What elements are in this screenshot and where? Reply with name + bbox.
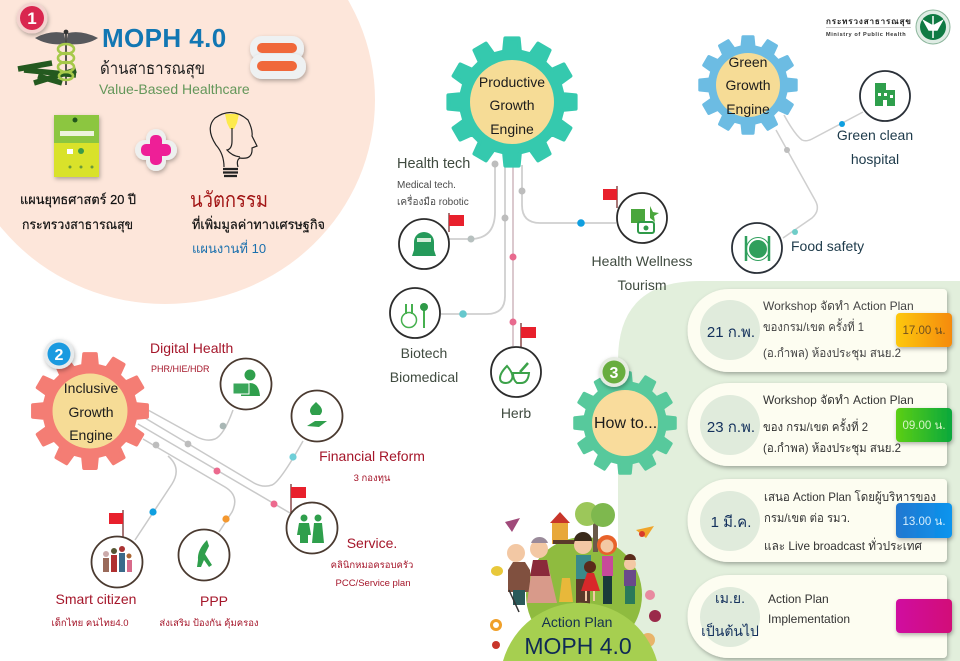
text: ministry: กระทรวงสาธารณสุข (22, 217, 133, 233)
girl (581, 561, 600, 601)
icon: caduceus (18, 30, 98, 85)
connector lines: green engine (776, 112, 863, 238)
grandfather (507, 544, 530, 612)
card: 1 Mar (688, 479, 952, 562)
badge 1: 1 (27, 9, 37, 28)
gear: productive growth engine: Engine (490, 121, 534, 137)
mother (597, 535, 617, 604)
text: health tech: Health tech (397, 156, 470, 172)
icon: equals (250, 36, 306, 79)
node: food safety (732, 223, 782, 273)
gear: inclusive growth engine: Inclusive (64, 380, 118, 396)
text: ppp: PPP (200, 593, 228, 609)
text: health wellness tourism: Health Wellness (592, 253, 692, 269)
text: biotech biomedical: Biotech (401, 345, 447, 361)
text: food safety: Food safety (791, 238, 864, 254)
gear: green growth engine: Engine (726, 101, 770, 117)
gear: productive growth engine: Growth (489, 97, 535, 113)
text: service: Service. (347, 535, 397, 551)
connector dots: productive engine (459, 160, 585, 326)
decorations: butterfly, bee, flowers (490, 518, 661, 649)
gear: inclusive growth engine: Engine (69, 427, 113, 443)
badge 2: 2 (55, 347, 64, 364)
text: value based healthcare: Value-Based Healthcare (99, 81, 250, 97)
text: digital health (150, 340, 233, 374)
connector lines: inclusive engine (135, 410, 303, 540)
text: green clean hospital: Green clean (837, 127, 913, 143)
text: plan 10: แผนงานที่ 10 (192, 240, 266, 256)
dog (559, 578, 573, 602)
text: ppp: ส่งเสริม ป้องกัน คุ้มครอง (159, 618, 259, 629)
connector dots: inclusive engine (149, 423, 297, 523)
text: herb: Herb (501, 405, 531, 421)
grandmother (527, 537, 557, 603)
logo: ministry of public health: Ministry of Public Health (826, 32, 906, 38)
card: 21 Feb (688, 289, 952, 372)
connector dots: green engine (784, 121, 845, 235)
node: health wellness tourism (603, 186, 667, 243)
text: public health: ด้านสาธารณสุข (100, 59, 205, 79)
card: 21 Feb: 21 ก.พ. (707, 324, 755, 341)
card: 23 Feb: 09.00 น. (902, 420, 946, 432)
card: 21 Feb: 17.00 น. (902, 325, 946, 337)
text: health tech: Medical tech. (397, 180, 456, 191)
node: digital health (220, 358, 272, 410)
connector lines: productive engine (441, 165, 616, 346)
text: health tech: เครื่องมือ robotic (397, 194, 469, 208)
badge 1 (16, 2, 48, 34)
text: action plan: Action Plan (542, 614, 612, 630)
text: health tech (397, 156, 470, 208)
text: green clean hospital: hospital (851, 151, 899, 167)
text: digital health: Digital Health (150, 340, 233, 356)
hill foreground (503, 603, 657, 661)
heading: MOPH 4.0: MOPH 4.0 (102, 23, 227, 53)
house and tree (550, 502, 615, 552)
card: 1 Mar: เสนอ Action Plan โดยผู้บริหารของ (764, 490, 936, 505)
icon: plus (135, 129, 177, 171)
card: 21 Feb: (อ.กำพล) ห้องประชุม สนย.2 (763, 346, 901, 361)
card: 23 Feb: ของ กรม/เขต ครั้งที่ 2 (763, 418, 868, 434)
text: financial reform: 3 กองทุน (354, 473, 391, 484)
gear: green growth engine: Growth (725, 77, 771, 93)
text: smart citizen: เด็กไทย คนไทย4.0 (51, 616, 129, 629)
text: smart citizen: Smart citizen (56, 591, 136, 607)
text: service: คลินิกหมอครอบครัว (331, 560, 413, 571)
icon: strategy book (54, 115, 99, 177)
boy (624, 554, 636, 604)
text: MOPH 4.0: MOPH 4.0 (524, 633, 632, 659)
node: health tech robot (399, 213, 464, 269)
gear: green growth engine: Green (729, 54, 767, 70)
text: ppp (159, 593, 259, 629)
gear: productive growth engine: Productive (479, 74, 545, 90)
gear: green growth engine (700, 37, 796, 133)
node: herb (491, 323, 541, 397)
text: value add: ที่เพิ่มมูลค่าทางเศรษฐกิจ (192, 216, 325, 233)
text: financial reform (319, 448, 425, 484)
card: 23 Feb: Workshop จัดทำ Action Plan (763, 393, 914, 407)
node: service (286, 484, 338, 554)
text: financial reform: Financial Reform (319, 448, 425, 464)
text: innovation: นวัตกรรม (190, 189, 268, 212)
text: health wellness tourism: Tourism (617, 277, 667, 293)
logo: ministry of public health: กระทรวงสาธารณสุข (826, 17, 912, 27)
card: 21 Feb: ของกรม/เขต ครั้งที่ 1 (763, 318, 864, 334)
card: 1 Mar: กรม/เขต ต่อ รมว. (764, 511, 850, 525)
card: from April: Implementation (768, 612, 850, 626)
card: from April: เป็นต้นไป (701, 622, 759, 639)
icon: idea light bulb (210, 112, 257, 176)
badge 3 (599, 357, 629, 387)
gear: productive growth engine (448, 38, 576, 166)
text: smart citizen (51, 591, 136, 629)
text: green clean hospital (837, 127, 913, 167)
text: service (331, 535, 413, 589)
gear: how to (575, 373, 675, 473)
text: biotech biomedical: Biomedical (390, 369, 458, 385)
node: ppp (178, 530, 230, 580)
text: 20 year strategy: แผนยุทธศาสตร์ 20 ปี (20, 192, 136, 208)
card: 1 Mar: 13.00 น. (902, 516, 946, 528)
node: biotech (390, 288, 440, 338)
card: from April (688, 575, 952, 658)
panel: how-to green background (618, 281, 960, 661)
card: from April: เม.ย. (715, 590, 745, 606)
node: smart citizen (92, 510, 142, 588)
gear: inclusive growth engine: Growth (68, 404, 114, 420)
card: 23 Feb: (อ.กำพล) ห้องประชุม สนย.2 (763, 441, 901, 456)
card: from April: Action Plan (768, 592, 829, 606)
card: 21 Feb: Workshop จัดทำ Action Plan (763, 299, 914, 313)
logo: ministry of public health (826, 10, 950, 44)
illustration: family on hill (490, 502, 661, 661)
text: health wellness tourism (592, 253, 692, 293)
text: biotech biomedical (390, 345, 458, 385)
panel: MOPH 4.0 peach circle (0, 0, 375, 304)
card: 23 Feb: 23 ก.พ. (707, 419, 755, 436)
node: financial reform (292, 390, 342, 442)
gear: how to: How to... (594, 415, 657, 432)
node: green clean hospital (860, 71, 910, 121)
badge 3: 3 (610, 365, 619, 382)
badge 2 (44, 339, 74, 369)
father (574, 532, 592, 604)
card: 23 Feb (688, 383, 952, 466)
card: 1 Mar: และ Live broadcast ทั่วประเทศ (764, 537, 922, 553)
text: digital health: PHR/HIE/HDR (151, 364, 210, 374)
card: 1 Mar: 1 มี.ค. (711, 514, 751, 531)
text: service: PCC/Service plan (336, 578, 410, 589)
gear: inclusive growth engine (33, 354, 147, 468)
